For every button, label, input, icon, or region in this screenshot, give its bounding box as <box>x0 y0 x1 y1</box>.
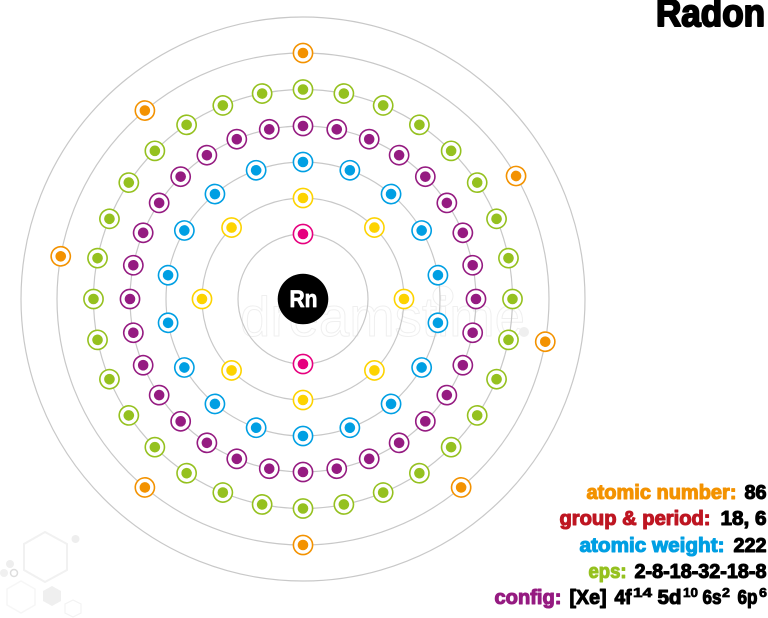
atomic weight row: atomic weight: <box>580 535 724 557</box>
electron configuration row <box>494 585 767 609</box>
electron configuration row: 6 <box>759 585 767 600</box>
electron configuration row: 2 <box>722 585 730 600</box>
electron configuration row: 6p <box>738 587 758 609</box>
electron configuration row: 10 <box>683 585 698 600</box>
electrons per shell row: eps: <box>588 561 626 583</box>
shell 6: 8 orange electrons <box>50 43 556 555</box>
shell 1: 2 pink electrons <box>293 224 313 374</box>
electron configuration row: config: <box>494 587 562 609</box>
group and period row: 18, 6 <box>720 508 766 530</box>
shell 5: 32 green electrons <box>84 80 522 518</box>
atomic number row: 86 <box>744 482 766 504</box>
decorative hexagons <box>0 532 81 617</box>
group and period row: group & period: <box>560 508 710 530</box>
shell 2: 8 yellow electrons <box>192 188 414 410</box>
electron configuration row: 4f <box>614 587 632 609</box>
orbit rings <box>21 17 585 581</box>
shell 3: 18 blue electrons <box>157 152 449 446</box>
electron configuration row: 5d <box>658 587 682 609</box>
nucleus <box>278 274 328 324</box>
electron configuration row: 6s <box>702 587 722 609</box>
electron configuration row: 14 <box>633 585 653 600</box>
nucleus: Rn <box>290 286 318 313</box>
atomic weight row: 222 <box>734 535 766 557</box>
atomic number row: atomic number: <box>586 482 736 504</box>
electrons per shell row: 2-8-18-32-18-8 <box>634 561 766 583</box>
electron configuration row: [Xe] <box>570 587 606 609</box>
watermark: dreamstime <box>240 285 525 348</box>
shell 4: 32 purple electrons <box>120 116 486 482</box>
